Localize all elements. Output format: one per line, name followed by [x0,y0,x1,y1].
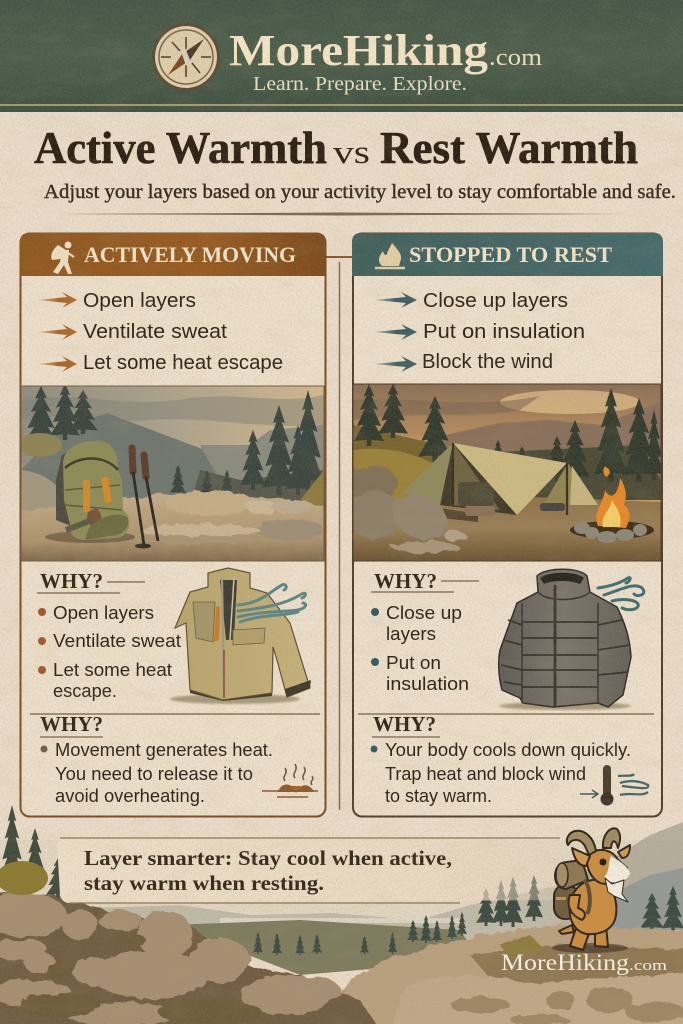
list: actions: Ventilate sweat [83,320,227,343]
icon: compass logo [152,23,220,91]
icon: thermometer and wind [580,765,648,806]
list: actions [374,289,585,373]
list: actions: Let some heat escape [83,351,283,374]
subtitle: Adjust your layers based on your activity level to stay comfortable and safe. [44,181,676,203]
panel header [20,233,326,276]
left rocks [0,893,380,1024]
block: why body cools: to stay warm. [385,785,492,806]
icon: backpack [45,441,135,543]
scene: backpack and trekking poles [22,386,324,560]
callout banner: stay warm when resting. [84,871,324,895]
arrow [38,324,77,340]
arrow [374,356,417,372]
tarp shelter [402,443,598,522]
icon: campfire [375,243,405,268]
panel header: ACTIVELY MOVING [84,242,296,267]
block: why movement: You need to release it to [55,763,253,784]
block: why movement: Movement generates heat. [55,739,273,760]
brand wordmark: MoreHiking [229,26,488,75]
block: why body cools: Trap heat and block wind [385,763,586,784]
connector between panels [326,257,353,810]
distant trees [253,875,683,955]
icon: tan jacket [170,568,311,704]
arrow [374,324,417,340]
bullet list: insulation [386,673,469,694]
heading: WHY? [40,712,103,736]
icon: puffer jacket [499,569,631,710]
block: why layers [371,569,644,710]
bullet list: Close up [386,602,462,623]
header band [0,0,683,112]
bullet list: Let some heat [53,659,172,680]
arrow [38,292,77,308]
block: why body cools [370,712,648,806]
list: actions: Block the wind [422,350,553,373]
icon: hiker [51,242,74,274]
heading: WHY? [374,569,437,593]
backpack [554,860,588,919]
callout banner: Layer smarter: Stay cool when active, [84,846,452,870]
title: Rest Warmth [380,123,638,173]
head [586,850,627,884]
panel header [352,233,663,276]
icon: heat steam [262,764,318,797]
heading [371,569,479,593]
left pines [0,805,70,898]
bullet list: Ventilate sweat [53,630,181,651]
list: actions [38,289,283,374]
boulders [349,465,466,553]
body [570,880,616,934]
icon: trekking poles [132,448,158,548]
title [34,123,638,173]
campfire [570,467,654,543]
legs and tail [559,925,574,934]
footer wordmark: .com [629,958,667,974]
scene: tarp camp and fire [349,384,664,561]
footer wordmark: MoreHiking [501,950,630,975]
heading [37,569,145,593]
bullet list [371,602,469,694]
mascot: goat hiker [552,828,630,953]
panel: actively moving [10,233,335,816]
bullet list: Open layers [53,602,154,623]
title: vs [333,135,370,171]
list: actions: Close up layers [423,289,568,312]
block: why movement: avoid overheating. [55,785,205,806]
panel header: STOPPED TO REST [409,242,612,267]
block: why layers [37,568,311,704]
arrow [374,292,417,308]
brand wordmark: .com [489,45,542,71]
list: actions: Open layers [83,289,196,312]
footer wordmark [501,950,667,975]
bullet list: layers [386,623,436,644]
heading: WHY? [373,712,436,736]
title: Active Warmth [34,123,327,173]
heading: WHY? [40,569,103,593]
tagline: Learn. Prepare. Explore. [253,73,467,95]
panel: stopped to rest [349,233,664,816]
right ground [0,893,683,1024]
horns [567,831,596,855]
bullet list: Put on [386,652,441,673]
callout banner [57,838,566,903]
icon: wind [238,585,306,622]
bullet list: escape. [53,680,117,701]
bullet list [38,602,181,701]
list: actions: Put on insulation [423,320,585,343]
block: why body cools: Your body cools down quickly. [385,739,631,760]
landscape: bottom scene [0,805,683,1024]
arrow [38,356,77,372]
block: why movement [40,712,318,806]
icon: wind [598,578,644,610]
